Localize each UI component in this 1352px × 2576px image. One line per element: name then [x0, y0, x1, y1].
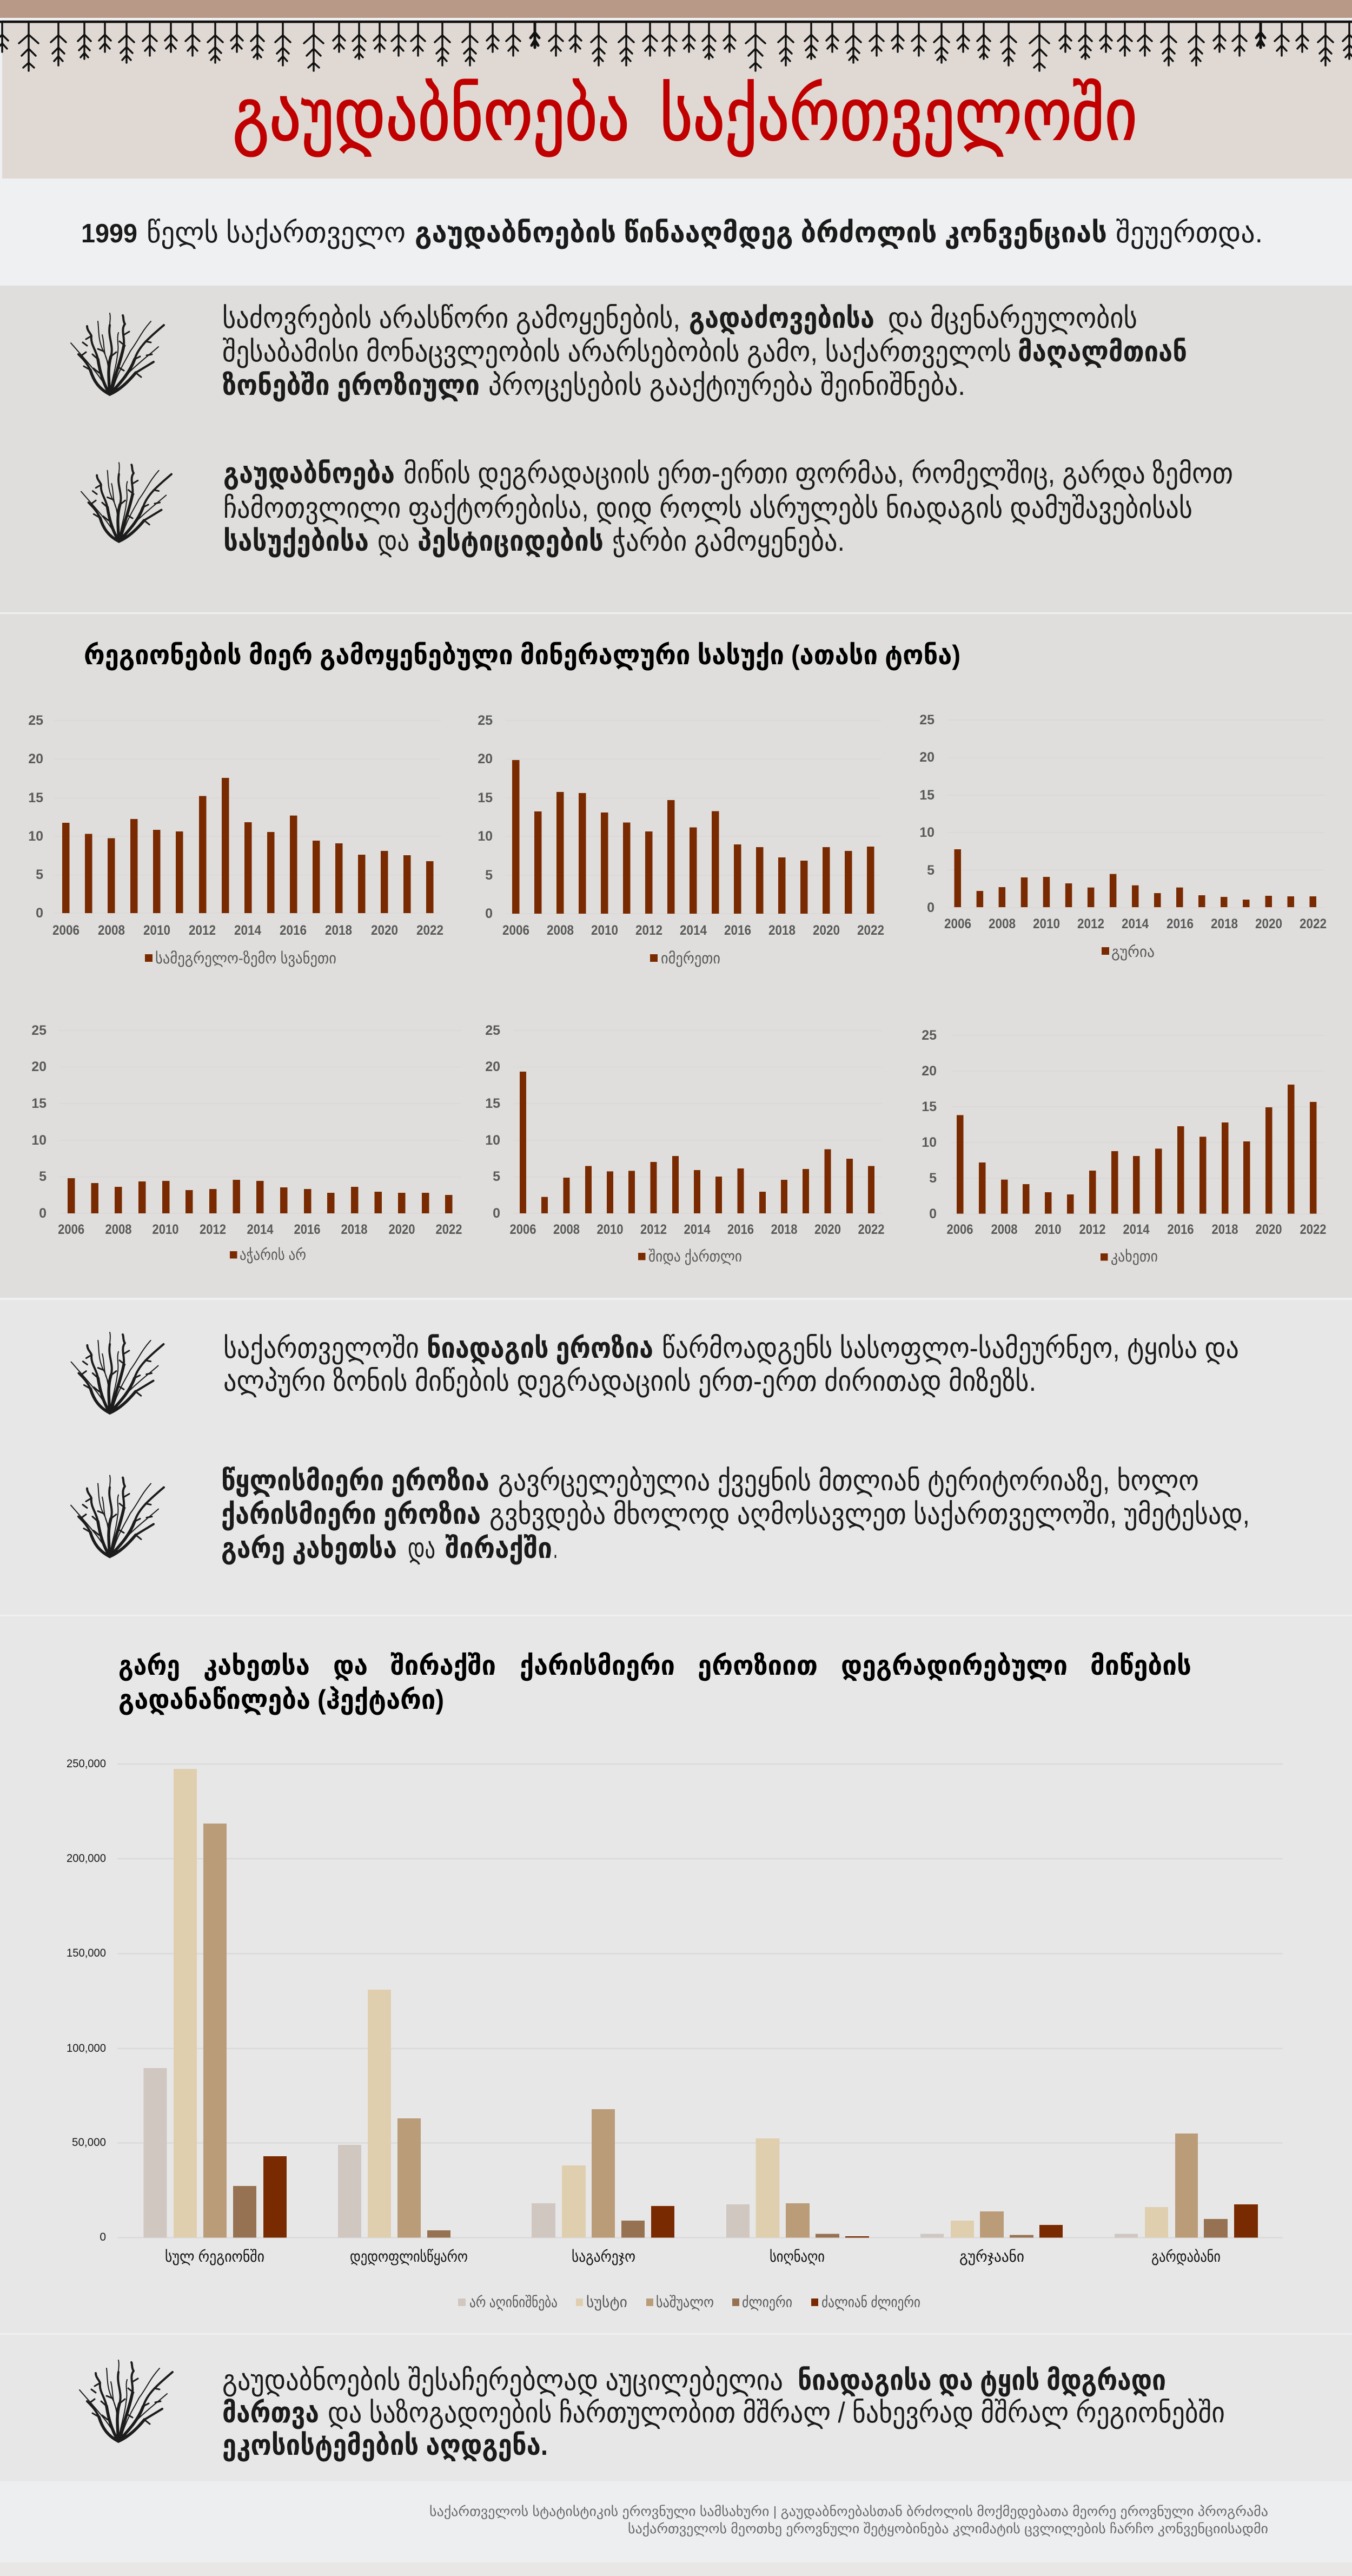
bars [954, 849, 1316, 907]
text block: conclusion: ნიადაგისა და ტყის მდგრადი [798, 2364, 1166, 2396]
icon: bush [79, 2360, 173, 2442]
panel: bottom band [0, 2562, 1352, 2576]
y axis labels: 25 [478, 713, 493, 728]
bars: Sighnaghi [726, 2138, 869, 2237]
bar chart: Guria [919, 712, 1327, 960]
intro statement: 1999 [81, 219, 137, 248]
legend: არ აღინიშნება [469, 2294, 558, 2310]
x axis labels: 2016 [294, 1222, 320, 1237]
x axis labels: 2020 [1256, 1222, 1282, 1237]
y axis labels: 25 [28, 713, 43, 728]
y axis labels: 0 [493, 1206, 500, 1221]
text block: desertification definition [223, 458, 1233, 557]
bars [957, 1085, 1316, 1214]
y axis labels: 15 [28, 790, 43, 805]
x axis labels: 2014 [234, 923, 261, 938]
text block: water and wind erosion: და [408, 1533, 435, 1564]
icon: bush [71, 1332, 163, 1414]
y axis labels: 10 [31, 1133, 47, 1148]
panel: soil erosion text [0, 1300, 1352, 1615]
text block: water and wind erosion: გვხვდება მხოლოდ აღმოსავლეთ საქართველოში, უმეტესად, [489, 1498, 1250, 1530]
x axis labels: 2006 [502, 923, 529, 938]
bars [68, 1178, 452, 1213]
panel: desertification text [0, 286, 1352, 612]
bar chart: Adjara [31, 1023, 462, 1263]
y axis labels: 25 [31, 1023, 47, 1038]
x axis labels: 2010 [597, 1222, 623, 1237]
bars: Sagarejo [532, 2109, 674, 2237]
x axis labels: 2016 [1167, 1222, 1194, 1237]
panel: wind erosion chart [0, 1616, 1352, 2333]
x axis labels: 2010 [591, 923, 618, 938]
x axis labels: 2014 [684, 1222, 711, 1237]
y axis labels [478, 713, 493, 921]
bars [520, 1072, 874, 1213]
text block: desertification definition: ჭარბი გამოყენება. [612, 525, 845, 557]
title: გაუდაბნოება [233, 75, 629, 156]
x axis labels: 2008 [105, 1222, 132, 1237]
text block: soil erosion: წარმოადგენს სასოფლო-სამეურნეო, ტყისა და [662, 1332, 1239, 1364]
y axis labels: 250,000 [67, 1758, 106, 1770]
text block: pastures overgrazing: შესაბამისი მონაცვლეობის არარსებობის გამო, საქართველოს [222, 336, 1011, 368]
x axis labels: 2008 [98, 923, 125, 938]
x axis labels [509, 1222, 885, 1237]
category labels: საგარეჯო [572, 2248, 635, 2265]
legend [458, 2294, 920, 2310]
y axis labels: 0 [485, 906, 493, 921]
x axis labels: 2018 [1211, 1222, 1238, 1237]
x axis labels: 2006 [52, 923, 79, 938]
x axis labels: 2012 [640, 1222, 667, 1237]
x axis labels: 2012 [200, 1222, 226, 1237]
x axis labels: 2014 [247, 1222, 274, 1237]
text block: conclusion: ეკოსისტემების აღდგენა. [222, 2429, 548, 2461]
x axis labels: 2022 [1300, 916, 1327, 932]
y axis labels: 15 [31, 1096, 47, 1111]
x axis labels: 2016 [724, 923, 751, 938]
y axis labels: 10 [28, 829, 43, 844]
x axis labels: 2014 [1123, 1222, 1150, 1237]
x axis labels: 2010 [153, 1222, 178, 1237]
legend: შიდა ქართლი [648, 1248, 742, 1265]
legend: საშუალო [656, 2294, 714, 2310]
x axis labels: 2008 [989, 916, 1016, 932]
text block: water and wind erosion: . [553, 1533, 558, 1564]
y axis labels: 25 [922, 1028, 937, 1043]
text block: conclusion: გაუდაბნოების შესაჩერებლად აუცილებელია [222, 2364, 783, 2396]
x axis labels: 2020 [1255, 916, 1282, 932]
heading: wind erosion chart: კახეთსა [203, 1650, 310, 1681]
y axis labels: 150,000 [67, 1947, 106, 1959]
panel: intro strip [0, 179, 1352, 286]
y axis labels [919, 712, 935, 915]
text block: water and wind erosion [221, 1465, 1250, 1564]
text block: pastures overgrazing [222, 302, 1187, 401]
y axis labels: 5 [493, 1169, 500, 1184]
heading: wind erosion chart [118, 1650, 1191, 1715]
legend: აჭარის არ [240, 1246, 306, 1263]
y axis labels: 25 [919, 712, 935, 728]
text block: soil erosion: ნიადაგის ეროზია [427, 1332, 653, 1364]
text block: soil erosion: საქართველოში [223, 1332, 419, 1364]
y axis labels: 50,000 [72, 2136, 106, 2149]
text block: sources [429, 2504, 1268, 2537]
x axis labels: 2008 [991, 1222, 1018, 1237]
intro statement: გაუდაბნოების წინააღმდეგ ბრძოლის კონვენციას [415, 217, 1107, 249]
x axis labels: 2010 [1033, 916, 1060, 932]
y axis labels: 10 [922, 1135, 937, 1150]
text block: soil erosion [223, 1332, 1239, 1397]
panel: fertilizer charts [0, 614, 1352, 1298]
text block: desertification definition: ჩამოთვლილი ფაქტორებისა, დიდ როლს ასრულებს ნიადაგის დამუშავებისას [223, 492, 1192, 524]
text block: desertification definition: გაუდაბნოება [223, 458, 395, 490]
legend: გურია [1111, 943, 1155, 960]
y axis labels [28, 713, 43, 921]
category labels: სიღნაღი [770, 2248, 825, 2265]
x axis labels: 2012 [1077, 916, 1104, 932]
x axis labels: 2016 [727, 1222, 754, 1237]
y axis labels: 10 [485, 1133, 500, 1148]
decorative fringe with hanging branches [0, 21, 1352, 71]
text block: conclusion: და საზოგადოების ჩართულობით მშრალ / ნახევრად მშრალ რეგიონებში [328, 2397, 1225, 2429]
category labels [165, 2248, 1221, 2265]
x axis labels: 2014 [680, 923, 707, 938]
y axis labels: 200,000 [67, 1852, 106, 1865]
y axis labels: 0 [39, 1206, 47, 1221]
x axis labels: 2022 [858, 1222, 885, 1237]
icon: bush [71, 313, 164, 395]
panel: conclusion [0, 2335, 1352, 2481]
heading: wind erosion chart: გადანაწილება (ჰექტარი) [118, 1685, 444, 1715]
category labels: დედოფლისწყარო [350, 2248, 468, 2265]
y axis labels [922, 1028, 937, 1221]
y axis labels: 0 [929, 1206, 937, 1221]
text block: desertification definition: მიწის დეგრადაციის ერთ-ერთი ფორმაა, რომელშიც, გარდა ზემოთ [403, 458, 1233, 490]
category labels: გურჯაანი [959, 2248, 1024, 2265]
legend: ძალიან ძლიერი [821, 2294, 920, 2310]
y axis labels: 15 [478, 790, 493, 805]
text block: water and wind erosion: გარე კახეთსა [221, 1533, 397, 1564]
x axis labels: 2020 [813, 923, 840, 938]
x axis labels: 2006 [946, 1222, 973, 1237]
category labels: გარდაბანი [1151, 2248, 1221, 2265]
text block: water and wind erosion: წყლისმიერი ეროზია [221, 1465, 489, 1497]
y axis labels: 20 [28, 751, 43, 767]
x axis labels: 2006 [944, 916, 971, 932]
y axis labels: 25 [485, 1023, 500, 1038]
bars [512, 760, 874, 914]
bars: total in region [144, 1769, 287, 2237]
text block: desertification definition: და [377, 525, 409, 557]
bars: Gardabani [1115, 2134, 1258, 2237]
x axis labels: 2020 [814, 1222, 841, 1237]
y axis labels: 5 [485, 868, 493, 883]
text block: soil erosion: ალპური ზონის მიწების დეგრადაციის ერთ-ერთ ძირითად მიზეზს. [223, 1365, 1036, 1397]
text block: desertification definition: პესტიციდების [417, 525, 604, 557]
y axis labels: 20 [922, 1064, 937, 1079]
y axis labels: 5 [929, 1171, 937, 1186]
text block: pastures overgrazing: საძოვრების არასწორი გამოყენების, [222, 302, 680, 334]
x axis labels: 2012 [189, 923, 216, 938]
y axis labels [67, 1758, 106, 2243]
legend: იმერეთი [661, 950, 720, 967]
bars: Dedoplistskaro [338, 1990, 450, 2237]
y axis labels: 5 [927, 863, 935, 878]
panel: title background [2, 20, 1352, 179]
bars: Gurjaani [920, 2211, 1063, 2237]
text block: water and wind erosion: ქარისმიერი ეროზია [221, 1498, 481, 1530]
y axis labels: 0 [927, 900, 935, 915]
x axis labels [944, 916, 1327, 932]
y axis labels: 5 [36, 867, 43, 882]
y axis labels: 10 [478, 829, 493, 844]
y axis labels: 20 [919, 750, 935, 765]
x axis labels: 2016 [280, 923, 307, 938]
x axis labels: 2022 [857, 923, 884, 938]
panel: top brown band [0, 0, 1352, 18]
bar chart: wind eroded land distribution [67, 1758, 1283, 2310]
x axis labels: 2012 [1079, 1222, 1105, 1237]
text block: sources: საქართველოს სტატისტიკის ეროვნული სამსახური | გაუდაბნოებასთან ბრძოლის მოქმედებათა მეორე ეროვნული პროგრამა [429, 2504, 1268, 2519]
bar chart: Imereti [478, 713, 884, 967]
intro statement: შეუერთდა. [1116, 217, 1263, 249]
x axis labels [946, 1222, 1326, 1237]
y axis labels: 15 [922, 1099, 937, 1114]
text block: conclusion: მართვა [222, 2397, 319, 2429]
text block: pastures overgrazing: და მცენარეულობის [888, 302, 1137, 334]
text block: water and wind erosion: გავრცელებულია ქვეყნის მთლიან ტერიტორიაზე, ხოლო [498, 1465, 1199, 1497]
x axis labels: 2010 [1035, 1222, 1061, 1237]
intro statement [81, 217, 1263, 249]
text block: desertification definition: სასუქებისა [223, 525, 369, 557]
y axis labels: 100,000 [67, 2042, 106, 2055]
legend: სამეგრელო-ზემო სვანეთი [155, 950, 336, 967]
y axis labels [485, 1023, 500, 1221]
panel: sources strip [0, 2481, 1352, 2562]
bar chart: Samegrelo-Zemo Svaneti [28, 713, 443, 967]
text block: water and wind erosion: შირაქში [445, 1533, 552, 1564]
text block: pastures overgrazing: გადაძოვებისა [689, 302, 874, 334]
text block: sources: საქართველოს მეოთხე ეროვნული შეტყობინება კლიმატის ცვლილების ჩარჩო კონვენციისადმი [628, 2521, 1268, 2537]
x axis labels: 2012 [635, 923, 662, 938]
x axis labels: 2022 [416, 923, 443, 938]
x axis labels: 2014 [1122, 916, 1149, 932]
heading: wind erosion chart: ქარისმიერი [520, 1650, 675, 1681]
x axis labels: 2008 [547, 923, 574, 938]
y axis labels: 20 [478, 751, 493, 767]
y axis labels: 20 [31, 1059, 47, 1074]
x axis labels: 2018 [771, 1222, 798, 1237]
x axis labels: 2020 [388, 1222, 415, 1237]
text block: pastures overgrazing: პროცესების გააქტიურება შეინიშნება. [488, 369, 965, 401]
heading: wind erosion chart: და [333, 1650, 368, 1681]
bars [62, 778, 434, 913]
heading: fertilizer by region: რეგიონების მიერ გამოყენებული მინერალური სასუქი (ათასი ტონა) [84, 640, 960, 671]
intro statement: წელს საქართველო [147, 217, 406, 249]
text block: pastures overgrazing: ზონებში ეროზიული [222, 369, 480, 401]
title: საქართველოში [660, 75, 1137, 156]
x axis labels: 2008 [553, 1222, 580, 1237]
heading: wind erosion chart: ეროზიით [698, 1650, 818, 1681]
x axis labels [58, 1222, 462, 1237]
y axis labels [31, 1023, 47, 1221]
y axis labels: 15 [919, 788, 935, 803]
x axis labels: 2018 [1211, 916, 1238, 932]
x axis labels: 2016 [1167, 916, 1194, 932]
bar chart: Kakheti [922, 1028, 1326, 1265]
legend: ძლიერი [742, 2294, 792, 2310]
x axis labels [502, 923, 884, 938]
x axis labels: 2018 [768, 923, 796, 938]
x axis labels: 2020 [371, 923, 398, 938]
legend: სუსტი [586, 2294, 627, 2310]
x axis labels: 2022 [436, 1222, 462, 1237]
heading: wind erosion chart: დეგრადირებული [841, 1650, 1068, 1681]
y axis labels: 10 [919, 825, 935, 840]
heading: wind erosion chart: შირაქში [390, 1650, 496, 1681]
y axis labels: 5 [39, 1169, 47, 1184]
text block: pastures overgrazing: მაღალმთიან [1018, 336, 1187, 368]
heading: wind erosion chart: მიწების [1090, 1650, 1191, 1681]
x axis labels: 2010 [143, 923, 170, 938]
y axis labels: 0 [100, 2231, 106, 2243]
y axis labels: 20 [485, 1059, 500, 1074]
legend: კახეთი [1111, 1248, 1158, 1265]
x axis labels: 2018 [325, 923, 352, 938]
x axis labels [52, 923, 443, 938]
text block: conclusion [222, 2364, 1225, 2461]
category labels: სულ რეგიონში [165, 2248, 264, 2265]
heading: wind erosion chart: გარე [118, 1650, 180, 1681]
title [233, 75, 1137, 156]
x axis labels: 2018 [341, 1222, 368, 1237]
y axis labels: 0 [36, 906, 43, 921]
x axis labels: 2006 [509, 1222, 536, 1237]
bar chart: Shida Kartli [485, 1023, 885, 1265]
icon: bush [71, 1476, 164, 1558]
y axis labels: 15 [485, 1096, 500, 1111]
icon: bush [81, 463, 171, 543]
x axis labels: 2006 [58, 1222, 84, 1237]
x axis labels: 2022 [1300, 1222, 1326, 1237]
